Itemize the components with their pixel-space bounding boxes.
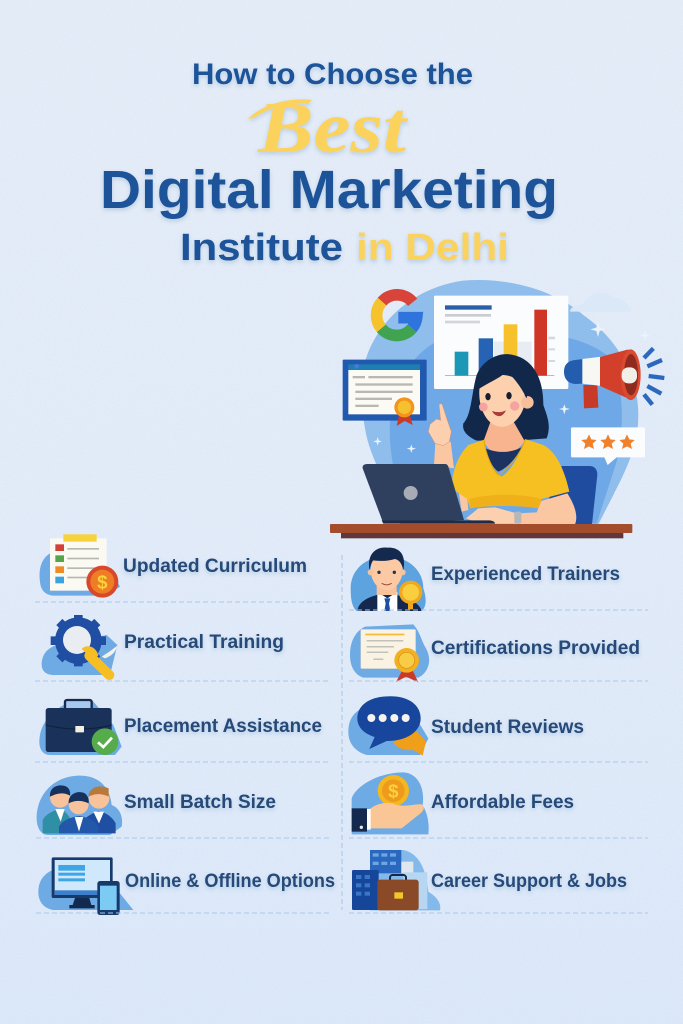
icon: certificate with medal: [350, 624, 429, 682]
icon: checklist with coin: $: [97, 571, 108, 592]
item: Placement Assistance: [39, 700, 322, 755]
bar: blue: [479, 338, 493, 376]
label: Affordable Fees: [431, 792, 574, 813]
icon: hand holding coin: $: [388, 781, 399, 802]
icon: speech bubbles: [348, 696, 428, 756]
item: Career Support & Jobs: [352, 850, 627, 910]
title line: Institute in Delhi: [180, 227, 509, 269]
bar: red: [534, 310, 547, 376]
right arm: [515, 493, 576, 524]
label: Experienced Trainers: [431, 564, 620, 585]
feature list: left column: [37, 534, 335, 915]
icon: buildings and briefcase: [352, 850, 440, 910]
title line: How to Choose the: How to Choose the: [192, 58, 473, 91]
desk: [330, 524, 632, 538]
icon: monitor and phone: [38, 857, 133, 915]
shirt neckline navy: [486, 447, 523, 472]
item: Updated Curriculum: [40, 534, 307, 598]
smile: [492, 410, 506, 416]
icon: three people: [37, 776, 122, 835]
label: Small Batch Size: [124, 792, 276, 813]
chart card: [434, 296, 568, 389]
megaphone sound rays: [644, 348, 664, 405]
background blob: [361, 280, 638, 524]
item: Small Batch Size: [37, 776, 276, 835]
raised hand: [428, 404, 451, 446]
hair back: [463, 354, 549, 441]
rating speech card: [571, 427, 645, 465]
item: Student Reviews: [348, 696, 584, 756]
shirt lower shade: [469, 495, 541, 508]
title word: Best: Best: [257, 87, 409, 168]
eyes: [485, 393, 491, 400]
woman: [428, 354, 576, 524]
bar: teal: [455, 352, 468, 376]
title line: Institute in Delhi: in Delhi: [356, 227, 509, 269]
icon: megaphone: [564, 348, 664, 408]
icon: briefcase with check: [39, 700, 122, 755]
title: [100, 58, 558, 269]
bar: yellow: [504, 324, 517, 376]
label: Placement Assistance: [124, 716, 322, 737]
certificate card: [343, 360, 427, 426]
item: Certifications Provided: [350, 624, 640, 682]
label: Certifications Provided: [431, 638, 640, 659]
label: Online & Offline Options: [125, 871, 335, 892]
item: Affordable Fees: [352, 772, 574, 834]
label: Practical Training: [124, 632, 284, 653]
title line: Digital Marketing: Digital Marketing: [100, 160, 558, 220]
yellow shirt: [452, 439, 569, 508]
chair: [543, 466, 597, 524]
neck: [483, 418, 525, 465]
hero illustration: woman at desk with marketing icons: [330, 280, 664, 538]
watch: [514, 512, 521, 524]
fringe: [477, 360, 528, 398]
item: Online & Offline Options: [38, 857, 335, 915]
cheeks: [479, 403, 488, 411]
label: Career Support & Jobs: [431, 871, 627, 892]
item: Experienced Trainers: [351, 548, 620, 611]
inner blob: [390, 331, 622, 523]
icon: gear and wrench: [42, 615, 117, 675]
icon: hand holding coin: [352, 772, 429, 834]
item: Practical Training: [42, 615, 284, 675]
feature list: right column: [348, 548, 640, 910]
left upper arm: [458, 488, 468, 512]
icon: Google G: [377, 295, 417, 335]
icon: trainer with medal: [351, 548, 426, 611]
icon: checklist with coin: [40, 534, 120, 598]
collar: [484, 440, 525, 475]
laptop: [363, 464, 495, 524]
raised arm: [434, 442, 454, 468]
stars: [581, 434, 635, 449]
sparkles: [373, 322, 650, 453]
cloud: [570, 293, 632, 312]
face: [479, 375, 525, 427]
ribbon seal: [397, 413, 413, 426]
label: Updated Curriculum: [123, 556, 307, 577]
typing hand: [466, 507, 517, 524]
label: Student Reviews: [431, 717, 584, 738]
title line: Institute in Delhi: Institute: [180, 227, 343, 269]
